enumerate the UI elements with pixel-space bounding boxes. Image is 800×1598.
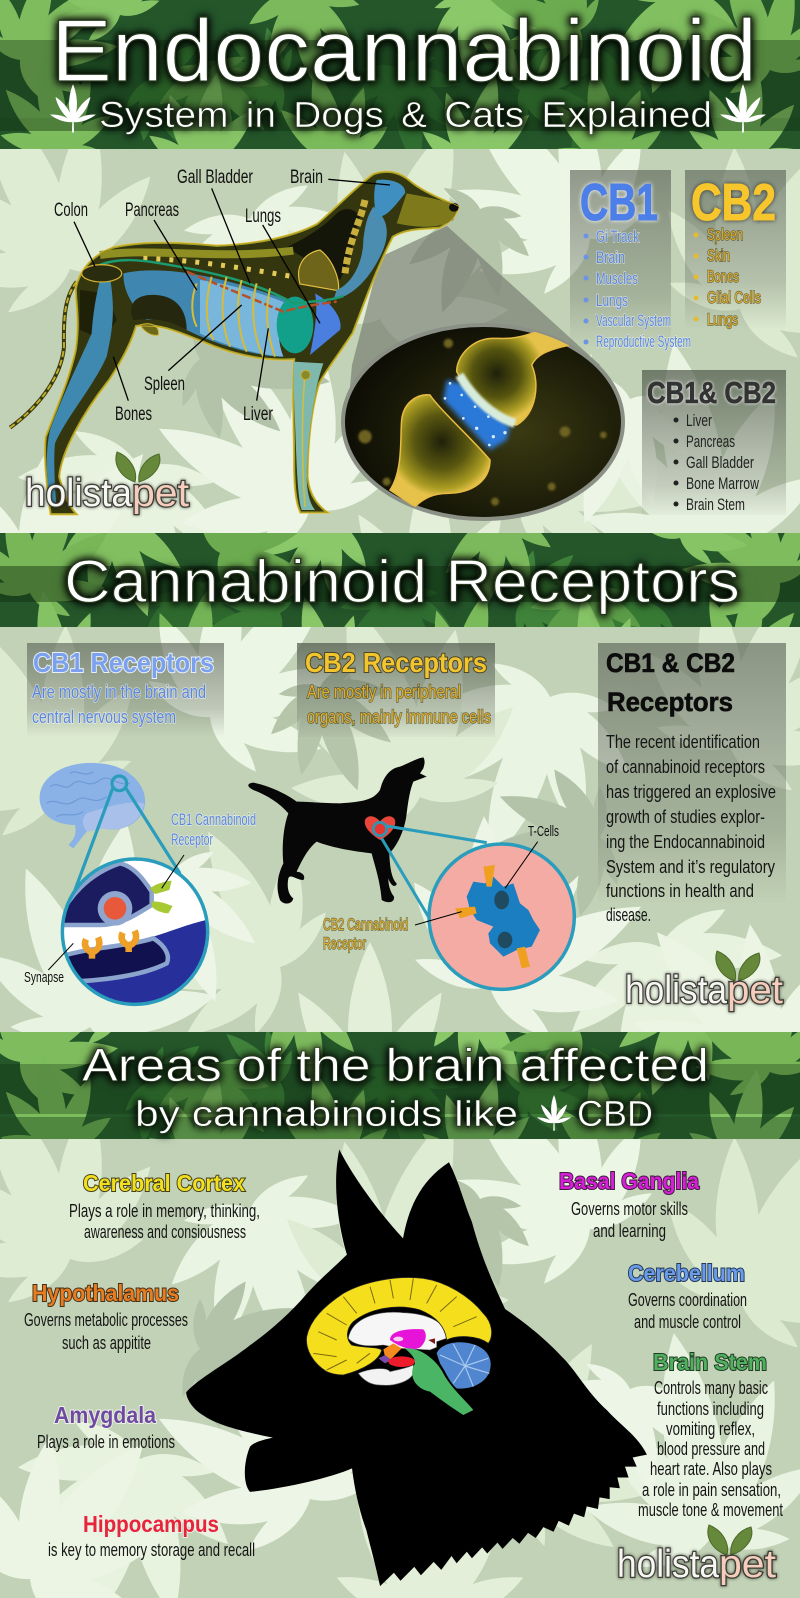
- heading: by cannabinoids like: by cannabinoids like: [135, 1093, 518, 1134]
- receptors band: [0, 533, 800, 627]
- text: Brain Stem: [638, 1349, 783, 1520]
- logo: holistapet (receptors panel): holista: [625, 969, 727, 1012]
- illustration: CB1 synapse: [40, 763, 213, 1017]
- text: Cerebellum: Governs coordination: [628, 1290, 747, 1310]
- list: shared tissues: Liver: [686, 411, 712, 430]
- foreleg: [293, 362, 323, 510]
- logo: holistapet (anatomy panel): pet: [132, 472, 189, 515]
- lower neuron bulb: [390, 395, 490, 507]
- heading: CB1 & CB2 Receptors: CB1 & CB2: [606, 648, 735, 678]
- text: Basal Ganglia: and learning: [593, 1221, 666, 1241]
- text: Hypothalamus: Governs metabolic processes: [24, 1310, 188, 1330]
- labels: T-cell circle: [323, 823, 559, 953]
- illustration: T-cell circle: [382, 826, 574, 989]
- text: Cerebellum: [628, 1260, 747, 1332]
- background neurons: [358, 339, 607, 506]
- labels: T-cell circle: CB2 Cannabinoid: [323, 915, 408, 934]
- text: Cerebral Cortex: awareness and consiousness: [84, 1222, 246, 1242]
- list: CB2 tissues: [694, 225, 761, 329]
- icon: green receptors: [150, 881, 173, 913]
- receptors: [483, 865, 495, 887]
- text: Hypothalamus: Hypothalamus: [32, 1280, 179, 1306]
- text: CB2 description: organs, mainly immune cells: [307, 707, 491, 727]
- brain: basal ganglia: [390, 1329, 426, 1349]
- labels: T-cell circle: T-Cells: [528, 823, 559, 840]
- neck: [333, 207, 387, 300]
- text: Cerebral Cortex: Plays a role in memory, thinking,: [69, 1201, 260, 1221]
- dog tail: [10, 282, 77, 428]
- illustration: dog anatomy: [10, 171, 459, 515]
- brain: cerebral cortex: [306, 1277, 492, 1375]
- outer ring: [62, 859, 208, 1004]
- brain: amygdala: [378, 1355, 392, 1363]
- list: shared tissues: Bone Marrow: [686, 474, 760, 493]
- list: CB2 tissues: Spleen: [707, 225, 743, 244]
- heading: CB1 & CB2: CB1& CB2: [647, 375, 776, 410]
- colon: [82, 265, 122, 282]
- logo: holistapet (receptors panel): [625, 951, 783, 1012]
- brain: cerebellum: [437, 1342, 491, 1389]
- list: CB1 tissues: Gi Track: [596, 227, 639, 246]
- background leaves: anatomy panel: [0, 149, 800, 533]
- labels: CB1 synapse: [24, 810, 256, 986]
- panel: CB2 Receptors: [297, 643, 495, 737]
- text: Basal Ganglia: Basal Ganglia: [559, 1168, 699, 1194]
- ribs: [192, 277, 275, 357]
- brain: hippocampus: [388, 1356, 415, 1367]
- illustration: dog head silhouette: [186, 1150, 647, 1586]
- list: CB2 tissues: Glial Cells: [707, 288, 761, 307]
- list: CB1 tissues: [584, 227, 691, 351]
- list: CB2 tissues: Lungs: [707, 310, 738, 329]
- list: CB2 tissues: Bones: [707, 267, 739, 286]
- heading: CB1 Receptors: CB1 Receptors: [33, 647, 214, 678]
- labels: dog anatomy: [54, 167, 323, 425]
- magnifier lines: [75, 788, 180, 890]
- background leaves: receptors panel: [0, 627, 800, 1032]
- brain: white matter: [348, 1312, 447, 1350]
- illustration: howling dog silhouette: [248, 757, 427, 904]
- heading: Cannabinoid Receptors: Cannabinoid Receptors: [64, 548, 740, 615]
- icon: heart: [365, 816, 395, 840]
- aorta: [83, 260, 343, 303]
- text: Cerebellum: Cerebellum: [628, 1260, 745, 1286]
- brain: dark red pineal: [428, 1338, 435, 1344]
- text: Cerebral Cortex: [69, 1170, 260, 1242]
- labels: dog anatomy: Liver: [243, 404, 273, 425]
- list: CB1 tissues: Lungs: [596, 291, 628, 310]
- text: Cerebral Cortex: Cerebral Cortex: [83, 1170, 245, 1196]
- text: Brain Stem: vomiting reflex,: [666, 1419, 755, 1439]
- organ leader lines: [74, 179, 390, 401]
- list: CB1 tissues: Muscles: [596, 269, 638, 288]
- logo: holistapet (receptors panel): pet: [727, 969, 783, 1012]
- title: Endocannabinoid: [51, 1, 757, 100]
- labels: dog anatomy: Brain: [290, 167, 323, 188]
- labels: CB1 synapse: Synapse: [24, 969, 64, 986]
- magnifier ring: [373, 822, 387, 836]
- cortex folds: [313, 1278, 477, 1370]
- rib cage light area: [200, 280, 287, 357]
- text: Brain Stem: Brain Stem: [653, 1349, 767, 1375]
- text: Hypothalamus: [24, 1280, 188, 1353]
- labels: dog anatomy: Gall Bladder: [177, 167, 253, 188]
- abdomen organs: [123, 270, 287, 357]
- labels: CB1 synapse: CB1 Cannabinoid: [171, 810, 256, 829]
- brain: brain stem: [405, 1348, 473, 1415]
- list: CB1 tissues: Reproductive System: [596, 332, 691, 351]
- text: explanation: The recent identification: [606, 732, 760, 752]
- muzzle: [397, 193, 458, 227]
- icon: cannabis leaf: [536, 1095, 572, 1131]
- list: CB1 tissues: Brain: [596, 248, 625, 267]
- icon: left cannabis leaf: [49, 84, 97, 132]
- list: shared tissues: Brain Stem: [686, 495, 745, 514]
- lower inner neuron: [60, 938, 168, 982]
- list: CB1 tissues: Vascular System: [596, 311, 671, 330]
- panel: CB1 tissue list: [570, 170, 691, 351]
- text: Amygdala: [37, 1402, 175, 1452]
- subtitle: System in Dogs & Cats Explained: [99, 94, 712, 135]
- logo: holistapet (anatomy panel): holista: [25, 472, 132, 515]
- heading: CB2 Receptors: CB2 Receptors: [305, 647, 487, 678]
- list: shared tissues: Gall Bladder: [686, 453, 754, 472]
- magnifier cone: [347, 226, 600, 420]
- leader lines: [48, 855, 184, 970]
- labels: dog anatomy: Bones: [115, 404, 152, 425]
- upper neuron: [57, 863, 152, 925]
- labels: dog anatomy: Spleen: [144, 374, 185, 395]
- text: Amygdala: Amygdala: [54, 1402, 156, 1428]
- synapse circle: [62, 859, 208, 1004]
- icon: orange receptors: [85, 931, 136, 959]
- text: CB2 description: Are mostly in peripheral: [307, 682, 461, 702]
- text: Basal Ganglia: Governs motor skills: [571, 1199, 688, 1219]
- text: Cerebellum: and muscle control: [634, 1312, 741, 1332]
- lower outer neuron: [86, 920, 206, 1003]
- heading: CB1 & CB2 Receptors: Receptors: [607, 687, 733, 717]
- heading: CB1: CB1: [580, 174, 658, 232]
- text: CB2 description: [307, 682, 491, 727]
- heading: CB2: CB2: [691, 174, 776, 232]
- text: explanation: functions in health and: [606, 881, 754, 901]
- brain: hypothalamus: [383, 1343, 402, 1360]
- logo: holistapet (brain panel): holista: [617, 1543, 719, 1586]
- list: CB2 tissues: Skin: [707, 246, 730, 265]
- labels: T-cell circle: Receptor: [323, 934, 366, 953]
- spine dorsal processes: [143, 258, 293, 277]
- vesicle: [98, 891, 132, 926]
- upper neuron bulb: [457, 332, 570, 425]
- lungs: [310, 293, 341, 355]
- text: Basal Ganglia: [559, 1168, 699, 1241]
- logo: holistapet (anatomy panel): [25, 452, 189, 515]
- text: explanation: growth of studies explor-: [606, 807, 765, 827]
- text: explanation: [606, 732, 776, 925]
- logo: holistapet (brain panel): pet: [719, 1543, 776, 1586]
- labels: dog anatomy: Lungs: [245, 206, 281, 227]
- logo: holistapet (brain panel): [617, 1525, 776, 1586]
- text: Hippocampus: is key to memory storage and recall: [48, 1540, 255, 1560]
- text: CB1 description: [32, 682, 206, 727]
- background leaves: brain panel: [0, 1139, 800, 1598]
- list: shared tissues: Pancreas: [686, 432, 735, 451]
- T-cell blobs: [467, 877, 540, 957]
- shoulder: [299, 250, 339, 291]
- dark neck cavity: [287, 209, 360, 280]
- heading: Areas of the brain affected: Areas of the brain affected: [82, 1039, 709, 1091]
- text: Amygdala: Plays a role in emotions: [37, 1432, 175, 1452]
- text: CB1 description: Are mostly in the brain and: [32, 682, 206, 702]
- illustration: neuron synapse: [343, 325, 623, 519]
- magnifier lines: [382, 826, 487, 917]
- neurotransmitters: [443, 380, 510, 450]
- panel: CB2 tissue list: [685, 170, 786, 330]
- icon: brain: [40, 763, 145, 848]
- nose: [449, 203, 459, 212]
- outer outline: [44, 171, 459, 515]
- brain: lower white lobe: [358, 1365, 413, 1385]
- list: shared tissues: [674, 411, 760, 514]
- pelvis cavity: [80, 290, 117, 340]
- panel: CB1 and CB2 Receptors: [598, 643, 786, 925]
- inner glow rim: [44, 171, 459, 515]
- male organ: [140, 324, 159, 335]
- header band: [0, 0, 800, 149]
- text: Hypothalamus: such as appitite: [62, 1333, 151, 1353]
- back muscle strip: [100, 251, 293, 255]
- brain areas band: [0, 1032, 800, 1139]
- hind leg: [47, 277, 113, 507]
- dog body: [44, 171, 459, 515]
- labels: CB1 synapse: Receptor: [171, 830, 213, 849]
- pink tissue circle: [429, 844, 574, 989]
- text: explanation: of cannabinoid receptors: [606, 757, 765, 777]
- panel: CB1 Receptors: [27, 643, 224, 737]
- leader lines: [415, 842, 538, 925]
- text: explanation: ing the Endocannabinoid: [606, 832, 765, 852]
- heading: CB1 & CB2 Receptors: [606, 648, 735, 717]
- text: explanation: disease.: [606, 905, 651, 925]
- labels: dog anatomy: Pancreas: [125, 200, 179, 221]
- chest organ: [277, 297, 313, 353]
- icon: right cannabis leaf: [719, 84, 767, 132]
- vesicle glow edge: [459, 375, 515, 423]
- text: CB1 description: central nervous system: [32, 707, 176, 727]
- panel: CB1 and CB2 tissue list: [642, 370, 786, 515]
- text: Hippocampus: [48, 1511, 255, 1560]
- text: Hippocampus: Hippocampus: [83, 1511, 219, 1537]
- vertebrae: [345, 200, 365, 273]
- intestine line: [187, 272, 337, 312]
- labels: dog anatomy: Colon: [54, 200, 88, 221]
- abdomen dark patch: [131, 295, 187, 330]
- heading: CBD: CBD: [577, 1093, 653, 1134]
- skull and brain: [374, 180, 405, 217]
- illustration: sagittal brain: [306, 1277, 492, 1415]
